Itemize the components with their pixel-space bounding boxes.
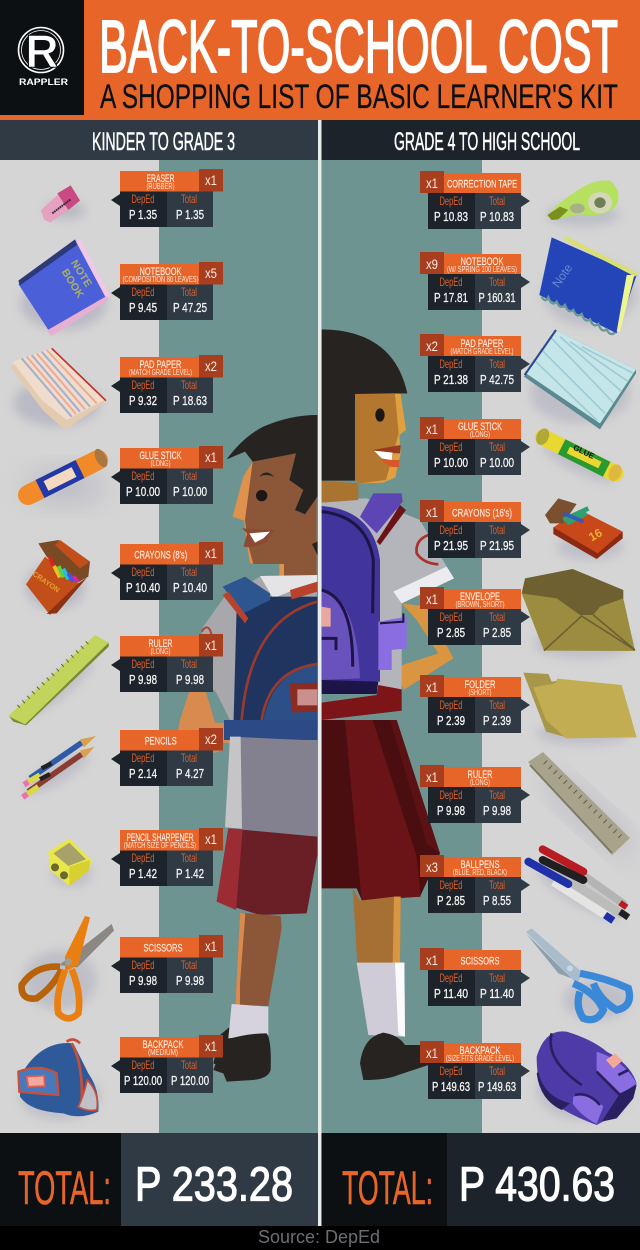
card: envelope: DepEd bbox=[440, 610, 462, 624]
icon: notebook: NOTE bbox=[68, 258, 94, 289]
icon: crayon box: CRAYON bbox=[31, 569, 61, 594]
card: ballpens: (BLUE, RED, BLACK) bbox=[453, 868, 507, 877]
card: glue stick: P 10.00 bbox=[126, 484, 160, 499]
card: backpack: P 149.63 bbox=[478, 1079, 516, 1094]
card: glue stick: (LONG) bbox=[150, 459, 171, 468]
card: ballpens bbox=[420, 855, 530, 913]
icon: crayons 16 bbox=[545, 498, 623, 560]
card: correction tape: DepEd bbox=[440, 194, 462, 208]
card: pad paper: P 42.75 bbox=[480, 372, 514, 387]
card: backpack bbox=[111, 1035, 223, 1093]
card: envelope: Total bbox=[489, 610, 505, 624]
card: pad paper: DepEd bbox=[440, 357, 462, 371]
card: eraser: P 1.35 bbox=[129, 207, 157, 222]
icon: pad paper bbox=[10, 348, 106, 430]
card: pad paper: x2 bbox=[205, 358, 217, 374]
card: ballpens: Total bbox=[489, 878, 505, 892]
card: eraser: Total bbox=[181, 192, 197, 206]
card: folder: Total bbox=[489, 698, 505, 712]
card: pad paper: Total bbox=[181, 378, 197, 392]
icons: high school items, middle group bbox=[522, 498, 637, 745]
icon: yellow glue stick: GLUE bbox=[572, 443, 596, 461]
card: pencil sharpener bbox=[111, 828, 223, 886]
icon: eraser bbox=[41, 185, 85, 223]
card: ruler: P 9.98 bbox=[129, 672, 157, 687]
card: crayons bbox=[111, 542, 223, 600]
card: pad paper: Total bbox=[489, 357, 505, 371]
card: pencil sharpener: DepEd bbox=[132, 851, 154, 865]
card: crayons bbox=[420, 500, 530, 558]
total: grade 4 to high school: TOTAL: bbox=[342, 1161, 433, 1214]
source line: Source: DepEd bbox=[258, 1227, 380, 1247]
girl lower body bbox=[322, 720, 440, 1080]
card: crayons: DepEd bbox=[132, 565, 154, 579]
card: glue stick: x1 bbox=[205, 449, 217, 465]
card: pencils: DepEd bbox=[132, 751, 154, 765]
card: backpack: x1 bbox=[426, 1045, 438, 1061]
card: ballpens: BALLPENS bbox=[460, 859, 500, 871]
card: notebook w/ spring: (W/ SPRING 100 LEAVES) bbox=[447, 265, 517, 274]
icon: blue notebook: Note bbox=[549, 261, 576, 290]
icon: crayons 16: 16 bbox=[586, 525, 605, 544]
card: notebook: P 47.25 bbox=[173, 300, 207, 315]
card: envelope: x1 bbox=[426, 591, 438, 607]
icon: ballpens bbox=[528, 849, 628, 927]
icons: high school items, bottom group bbox=[526, 849, 637, 1125]
icon: crayon box bbox=[25, 540, 90, 615]
card: envelope: ENVELOPE bbox=[460, 591, 500, 603]
card: glue stick: P 10.00 bbox=[173, 484, 207, 499]
card: notebook bbox=[111, 262, 223, 320]
card: pencil sharpener: (MATCH SIZE OF PENCILS) bbox=[124, 841, 196, 850]
card: pad paper bbox=[420, 334, 530, 392]
total: kinder to grade 3 bbox=[0, 1133, 318, 1226]
card: scissors bbox=[111, 935, 223, 993]
card: scissors: SCISSORS bbox=[144, 943, 182, 955]
card: envelope: P 2.85 bbox=[483, 625, 511, 640]
card: backpack: P 120.00 bbox=[171, 1073, 209, 1088]
icon: correction tape bbox=[547, 180, 620, 227]
card: ruler: (LONG) bbox=[470, 778, 490, 787]
card: glue stick: GLUE STICK bbox=[140, 450, 182, 462]
card: crayons: CRAYONS (8's) bbox=[134, 550, 187, 562]
card: correction tape: P 10.83 bbox=[434, 209, 468, 224]
card: notebook: DepEd bbox=[132, 285, 154, 299]
card: ruler: P 9.98 bbox=[437, 803, 465, 818]
card: pad paper: DepEd bbox=[132, 378, 154, 392]
icon: glue stick bbox=[25, 447, 110, 503]
card: notebook: x5 bbox=[205, 265, 217, 281]
card: correction tape: x1 bbox=[426, 175, 438, 191]
card: scissors: x1 bbox=[426, 952, 438, 968]
card: glue stick: DepEd bbox=[132, 469, 154, 483]
card: folder: P 2.39 bbox=[483, 713, 511, 728]
card: pencil sharpener: PENCIL SHARPENER bbox=[126, 832, 194, 844]
card: eraser: (RUBBER) bbox=[146, 182, 175, 191]
icon: pencil sharpener bbox=[48, 838, 92, 887]
icon: notebook bbox=[18, 238, 110, 336]
card: notebook: P 9.45 bbox=[129, 300, 157, 315]
logo: Rappler bbox=[0, 0, 84, 115]
card: folder bbox=[420, 675, 530, 733]
icon: blue backpack bbox=[18, 1040, 100, 1120]
card: backpack: x1 bbox=[205, 1038, 217, 1054]
card: scissors: Total bbox=[489, 971, 505, 985]
card: scissors: Total bbox=[181, 958, 197, 972]
card: scissors: DepEd bbox=[440, 971, 462, 985]
card: crayons: P 21.95 bbox=[480, 538, 514, 553]
card: ruler: x1 bbox=[426, 769, 438, 785]
card: envelope bbox=[420, 587, 530, 645]
card: envelope: (BROWN, SHORT) bbox=[456, 600, 505, 609]
card: ruler: (LONG) bbox=[150, 647, 171, 656]
card: backpack: P 149.63 bbox=[432, 1079, 470, 1094]
card: ballpens: DepEd bbox=[440, 878, 462, 892]
icons: kinder items, bottom group bbox=[18, 838, 114, 1120]
card: crayons: P 21.95 bbox=[434, 538, 468, 553]
icons: kinder items, middle group bbox=[8, 540, 109, 800]
icon: grey ruler bbox=[528, 752, 640, 864]
card: crayons: DepEd bbox=[440, 523, 462, 537]
icons: kinder items, top group bbox=[10, 185, 110, 430]
card: glue stick: P 10.00 bbox=[434, 455, 468, 470]
card: pencils: Total bbox=[181, 751, 197, 765]
card: folder: x1 bbox=[426, 679, 438, 695]
card: notebook: Total bbox=[181, 285, 197, 299]
icons: high school items, top group bbox=[524, 180, 638, 489]
card: scissors: P 9.98 bbox=[176, 973, 204, 988]
card: ruler: RULER bbox=[468, 769, 493, 781]
card: correction tape bbox=[420, 171, 530, 229]
girl upper body bbox=[322, 329, 454, 720]
card: pencils: P 2.14 bbox=[129, 766, 157, 781]
panel: grade 4 to high school items bbox=[420, 171, 640, 1125]
card: eraser: DepEd bbox=[132, 192, 154, 206]
illustration: boy bbox=[173, 415, 317, 1082]
card: eraser: ERASER bbox=[146, 173, 175, 185]
card: ballpens: x3 bbox=[426, 859, 438, 875]
card: ballpens: P 8.55 bbox=[483, 893, 511, 908]
icon: purple backpack bbox=[537, 1031, 637, 1125]
card: backpack: Total bbox=[489, 1064, 505, 1078]
card: notebook w/ spring: Total bbox=[489, 275, 505, 289]
column heading: kinder to grade 3: KINDER TO GRADE 3 bbox=[92, 128, 235, 156]
card: pencil sharpener: x1 bbox=[205, 831, 217, 847]
card: glue stick: P 10.00 bbox=[480, 455, 514, 470]
card: folder: P 2.39 bbox=[437, 713, 465, 728]
card: glue stick: GLUE STICK bbox=[458, 421, 502, 433]
card: ballpens: P 2.85 bbox=[437, 893, 465, 908]
card: pencils bbox=[111, 728, 223, 786]
icon: blue pad paper bbox=[524, 330, 636, 429]
card: crayons: x1 bbox=[426, 504, 438, 520]
card: backpack: DepEd bbox=[132, 1058, 154, 1072]
card: notebook w/ spring: P 160.31 bbox=[478, 290, 516, 305]
card: glue stick bbox=[111, 446, 223, 504]
icon: envelope bbox=[522, 569, 635, 658]
card: correction tape: P 10.83 bbox=[480, 209, 514, 224]
card: pad paper: (MATCH GRADE LEVEL) bbox=[450, 347, 514, 356]
icon: pencils bbox=[20, 736, 96, 800]
card: crayons: Total bbox=[489, 523, 505, 537]
card: backpack: BACKPACK bbox=[460, 1045, 501, 1057]
card: correction tape: CORRECTION TAPE bbox=[447, 179, 517, 191]
card: pad paper: (MATCH GRADE LEVEL) bbox=[129, 368, 192, 377]
card: glue stick bbox=[420, 417, 530, 475]
card: folder: DepEd bbox=[440, 698, 462, 712]
card: pad paper: x2 bbox=[426, 338, 438, 354]
card: ruler bbox=[420, 765, 530, 823]
card: pad paper: PAD PAPER bbox=[460, 338, 504, 350]
icon: notebook: BOOK bbox=[59, 267, 86, 301]
panel: kinder to grade 3 items bbox=[8, 169, 223, 1120]
card: backpack: Total bbox=[181, 1058, 197, 1072]
card: envelope: P 2.85 bbox=[437, 625, 465, 640]
icon: ruler bbox=[8, 635, 109, 725]
card: crayons: P 10.40 bbox=[173, 580, 207, 595]
card: notebook: NOTEBOOK bbox=[140, 266, 182, 278]
card: scissors: x1 bbox=[205, 938, 217, 954]
illustration: girl bbox=[322, 329, 454, 1080]
card: pencils: x2 bbox=[205, 731, 217, 747]
boy upper body bbox=[173, 415, 317, 763]
card: backpack: DepEd bbox=[440, 1064, 462, 1078]
card: pad paper: P 9.32 bbox=[129, 393, 157, 408]
card: notebook w/ spring: DepEd bbox=[440, 275, 462, 289]
card: ruler: P 9.98 bbox=[483, 803, 511, 818]
center divider bbox=[318, 120, 322, 1226]
card: notebook: (COMPOSITION 80 LEAVES) bbox=[122, 275, 199, 284]
card: scissors: SCISSORS bbox=[460, 956, 500, 968]
card: ruler: DepEd bbox=[440, 788, 462, 802]
card: ruler: DepEd bbox=[132, 657, 154, 671]
card: notebook w/ spring: x9 bbox=[426, 256, 438, 272]
card: ruler: Total bbox=[489, 788, 505, 802]
card: crayons: P 10.40 bbox=[126, 580, 160, 595]
card: backpack: (SIZE FITS GRADE LEVEL) bbox=[446, 1054, 514, 1063]
card: scissors: P 11.40 bbox=[480, 986, 514, 1001]
card: scissors: P 11.40 bbox=[434, 986, 468, 1001]
card: pad paper: P 21.38 bbox=[434, 372, 468, 387]
card: pad paper: P 18.63 bbox=[173, 393, 207, 408]
total: kinder to grade 3: P 233.28 bbox=[135, 1158, 293, 1212]
card: eraser bbox=[111, 169, 223, 227]
icon: orange scissors bbox=[22, 916, 114, 1018]
total: grade 4 to high school bbox=[322, 1133, 640, 1226]
card: folder: FOLDER bbox=[464, 679, 496, 691]
total: kinder to grade 3: TOTAL: bbox=[18, 1161, 111, 1214]
card: crayons: CRAYONS (16's) bbox=[452, 508, 512, 520]
card: notebook w/ spring bbox=[420, 252, 530, 310]
column heading: kinder to grade 3 bbox=[0, 120, 318, 160]
card: backpack bbox=[420, 1041, 530, 1099]
card: folder: (SHORT) bbox=[468, 688, 492, 697]
header banner bbox=[0, 0, 640, 120]
card: glue stick: Total bbox=[489, 440, 505, 454]
icon: folder bbox=[523, 673, 637, 745]
card: crayons: x1 bbox=[205, 545, 217, 561]
card: pencils: P 4.27 bbox=[176, 766, 204, 781]
card: ruler: RULER bbox=[148, 638, 173, 650]
card: glue stick: (LONG) bbox=[470, 430, 490, 439]
card: scissors: DepEd bbox=[132, 958, 154, 972]
card: ruler bbox=[111, 634, 223, 692]
logo: Rappler: RAPPLER bbox=[19, 77, 69, 87]
column heading: grade 4 to high school bbox=[321, 120, 640, 160]
card: scissors: P 9.98 bbox=[129, 973, 157, 988]
card: ruler: Total bbox=[181, 657, 197, 671]
card: ruler: P 9.98 bbox=[176, 672, 204, 687]
card: backpack: P 120.00 bbox=[124, 1073, 162, 1088]
icon: blue notebook bbox=[539, 236, 638, 334]
card: ruler: x1 bbox=[205, 637, 217, 653]
card: glue stick: x1 bbox=[426, 421, 438, 437]
boy lower body bbox=[180, 720, 317, 1082]
card: correction tape: Total bbox=[489, 194, 505, 208]
card: eraser: x1 bbox=[205, 172, 217, 188]
card: pencil sharpener: P 1.42 bbox=[176, 866, 204, 881]
card: pencils: PENCILS bbox=[145, 736, 177, 748]
card: pad paper: PAD PAPER bbox=[140, 359, 182, 371]
card: crayons: Total bbox=[181, 565, 197, 579]
icon: blue scissors bbox=[526, 928, 630, 1020]
icon: yellow glue stick bbox=[534, 426, 624, 489]
card: notebook w/ spring: P 17.81 bbox=[434, 290, 468, 305]
card: pencil sharpener: P 1.42 bbox=[129, 866, 157, 881]
card: glue stick: Total bbox=[181, 469, 197, 483]
card: pencil sharpener: Total bbox=[181, 851, 197, 865]
card: pad paper bbox=[111, 355, 223, 413]
logo: Rappler: R bbox=[25, 25, 59, 77]
card: backpack: (MEDIUM) bbox=[148, 1048, 178, 1057]
card: glue stick: DepEd bbox=[440, 440, 462, 454]
card: eraser: P 1.35 bbox=[176, 207, 204, 222]
card: backpack: BACKPACK bbox=[142, 1039, 184, 1051]
card: notebook w/ spring: NOTEBOOK bbox=[460, 256, 504, 268]
card: scissors bbox=[420, 948, 530, 1006]
